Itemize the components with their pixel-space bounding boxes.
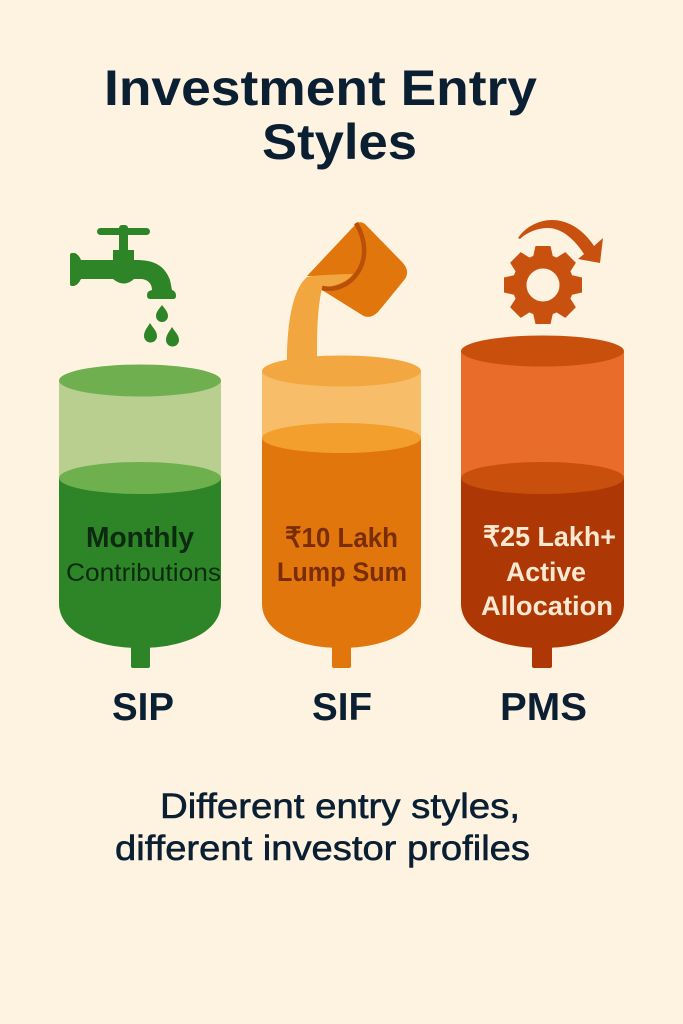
tank text: active allocation [481, 521, 616, 621]
tank text: lump sum: ₹10 Lakh [285, 522, 398, 553]
tank: SIP [59, 364, 221, 668]
tank text: monthly contributions: Monthly [86, 522, 194, 554]
caption: different investor profiles [115, 829, 530, 868]
icon: pouring bucket [287, 222, 407, 362]
panel: SIF [262, 222, 421, 729]
icon: dripping tap [70, 225, 179, 346]
caption: Different entry styles, [160, 787, 520, 826]
tank text: lump sum: Lump Sum [277, 557, 407, 587]
tank text: active allocation: ₹25 Lakh+ [483, 521, 616, 552]
tank text: lump sum [277, 522, 407, 587]
tank: SIF [262, 356, 421, 668]
title [104, 60, 537, 170]
title: Styles [262, 114, 417, 170]
tank text: monthly contributions: Contributions [66, 559, 221, 587]
tank text: monthly contributions [66, 522, 221, 587]
label: PMS: PMS [500, 686, 587, 729]
icon: gear with arrow [504, 220, 603, 324]
caption [115, 787, 530, 868]
title: Investment Entry [104, 60, 537, 116]
panel: SIP [59, 225, 221, 729]
tank text: active allocation: Allocation [481, 591, 613, 621]
label: SIP: SIP [112, 686, 174, 729]
tank: PMS [461, 336, 624, 668]
panel: PMS [461, 220, 624, 729]
tank text: active allocation: Active [506, 557, 586, 587]
label: SIF: SIF [312, 686, 372, 729]
